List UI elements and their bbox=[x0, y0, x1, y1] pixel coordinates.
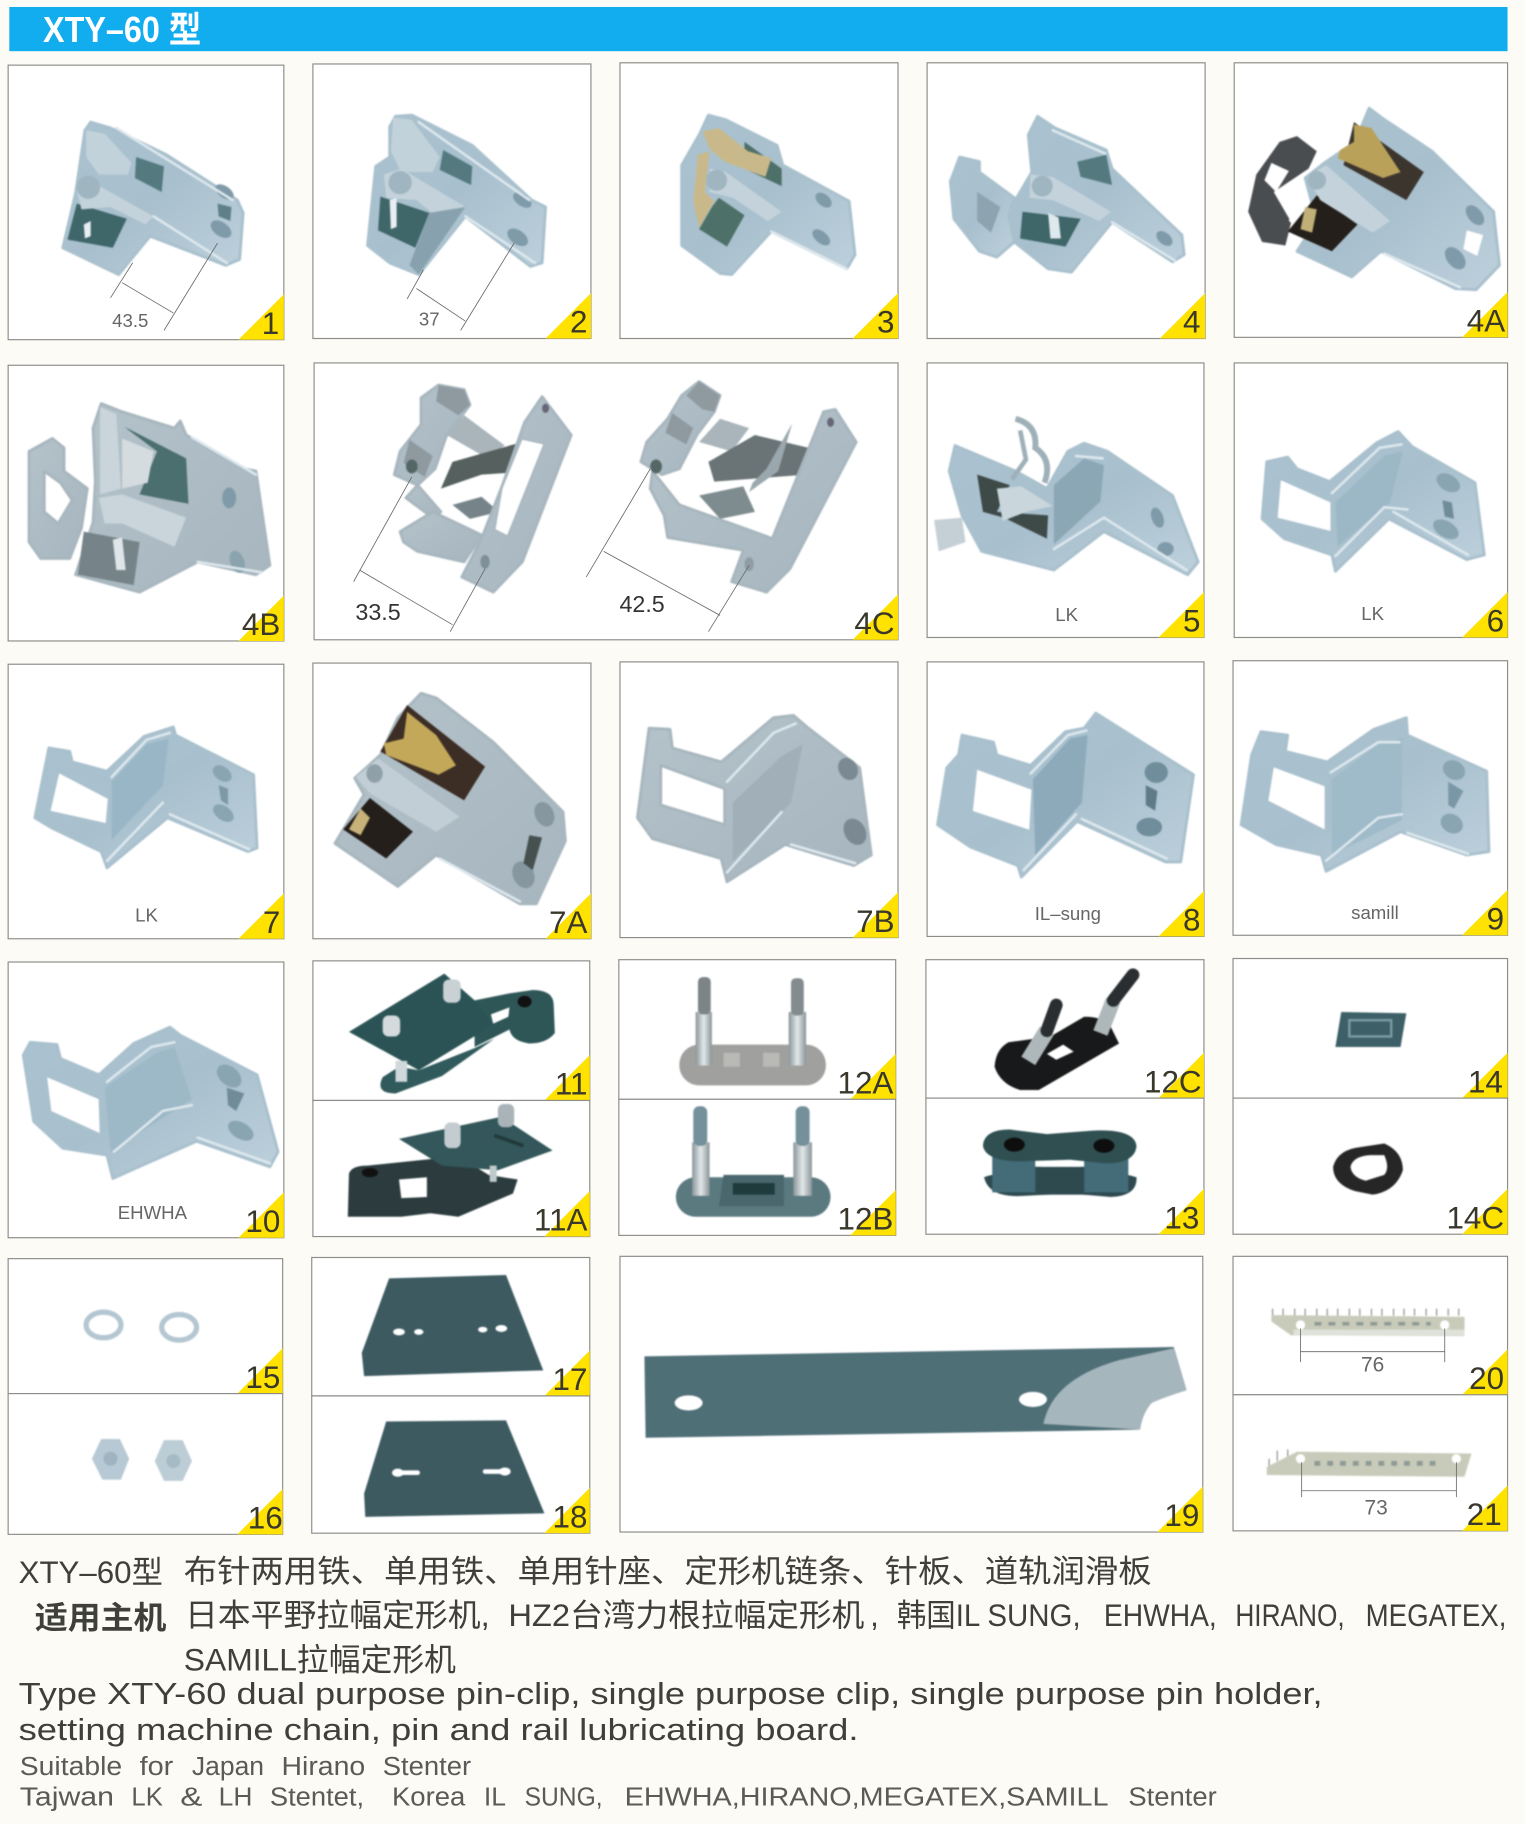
part: black pin holder 12C bbox=[995, 975, 1133, 1090]
text: applicable machines in Chinese: 日本平野拉幅定形机, bbox=[185, 1598, 490, 1633]
number tag 21: 21 bbox=[1467, 1497, 1502, 1532]
dimensions 33.5 and 42.5: 42.5 bbox=[619, 591, 665, 617]
number tag 15 bbox=[237, 1348, 283, 1395]
number tag 4: 4 bbox=[1183, 305, 1200, 340]
part: clip 4 bbox=[950, 116, 1184, 272]
panel: item 4A bbox=[1234, 63, 1508, 339]
part: clip 7A bbox=[335, 693, 565, 904]
number tag 5 bbox=[1159, 592, 1204, 639]
title banner bbox=[9, 7, 1508, 51]
number tag 7 bbox=[238, 893, 284, 940]
panel: item 8 bbox=[927, 662, 1204, 938]
number tag 9 bbox=[1462, 890, 1508, 936]
text: English suitable machines: Hirano bbox=[282, 1753, 365, 1781]
number tag 20 bbox=[1462, 1349, 1508, 1396]
number tag 19 bbox=[1157, 1487, 1203, 1533]
part: spring washers bbox=[86, 1312, 197, 1340]
part: left frame bbox=[394, 385, 571, 592]
number tag 8: 8 bbox=[1183, 903, 1200, 938]
dimension 73: 73 bbox=[1364, 1497, 1388, 1520]
panel: item 12B bbox=[619, 1099, 896, 1237]
panel: item 20 bbox=[1233, 1256, 1508, 1396]
brand label LK: LK bbox=[135, 904, 159, 925]
number tag 7: 7 bbox=[263, 905, 280, 940]
part: clip 9 bbox=[1241, 718, 1489, 871]
text: applicable machines in Chinese: HIRANO, bbox=[1235, 1598, 1345, 1633]
part: clip 10 bbox=[23, 1027, 278, 1178]
part: plate 17 bbox=[362, 1275, 543, 1376]
number tag 1: 1 bbox=[262, 306, 279, 341]
text: applicable machines in Chinese: HZ2台湾力根拉幅定形机 bbox=[508, 1598, 864, 1633]
panel: item 1 bbox=[8, 65, 284, 341]
dimension 76: 76 bbox=[1361, 1353, 1384, 1376]
panel: item 14C bbox=[1233, 1098, 1508, 1235]
text: English suitable machines: IL bbox=[484, 1783, 506, 1811]
part: pin plate 20 bbox=[1271, 1309, 1465, 1336]
number tag 4A: 4A bbox=[1467, 304, 1505, 339]
text: English suitable machines: Tajwan bbox=[20, 1783, 114, 1811]
brand label EHWHA: EHWHA bbox=[118, 1202, 188, 1223]
part: chain link with plate bbox=[349, 974, 555, 1093]
number tag 20: 20 bbox=[1469, 1361, 1504, 1396]
part: right frame bbox=[641, 382, 856, 592]
text: applicable machines in Chinese: EHWHA, bbox=[1104, 1598, 1217, 1633]
number tag 16: 16 bbox=[248, 1501, 283, 1536]
panel: item 7B bbox=[620, 662, 898, 939]
number tag 4C bbox=[853, 594, 898, 641]
number tag 3: 3 bbox=[877, 305, 895, 340]
panel: item 9 bbox=[1233, 661, 1508, 936]
number tag 13: 13 bbox=[1164, 1200, 1199, 1235]
number tag 6: 6 bbox=[1487, 604, 1504, 639]
number tag 12C: 12C bbox=[1144, 1064, 1202, 1099]
part: clip 2 bbox=[368, 115, 546, 275]
text: applicable machines in Chinese: , bbox=[870, 1598, 879, 1633]
part: chain link 13 bbox=[983, 1130, 1137, 1197]
text: applicable machines in Chinese: 适用主机 bbox=[35, 1601, 166, 1636]
number tag 1 bbox=[238, 294, 284, 341]
part: wave washer 14C bbox=[1333, 1143, 1403, 1195]
number tag 19: 19 bbox=[1164, 1498, 1199, 1533]
text: applicable machines in Chinese: SAMILL拉幅定形机 bbox=[184, 1642, 456, 1677]
title banner: XTY–60 型 bbox=[43, 9, 201, 50]
number tag 10: 10 bbox=[245, 1204, 280, 1239]
text: English suitable machines: for bbox=[140, 1753, 174, 1781]
number tag 14 bbox=[1462, 1053, 1508, 1099]
dimension 37 bbox=[407, 243, 514, 330]
panel: item 16 bbox=[8, 1394, 283, 1536]
part: small plate 14 bbox=[1335, 1012, 1406, 1047]
brand label samill: samill bbox=[1351, 902, 1399, 923]
text: English suitable machines: Suitable bbox=[20, 1753, 122, 1781]
number tag 3 bbox=[853, 293, 898, 340]
panel: item 11A bbox=[313, 1100, 590, 1238]
panel: item 13 bbox=[926, 1098, 1204, 1235]
panel: item 4 bbox=[927, 63, 1205, 340]
number tag 2: 2 bbox=[570, 305, 587, 340]
part: clip 1 bbox=[63, 122, 243, 275]
panel: item 12A bbox=[619, 960, 896, 1100]
number tag 7A bbox=[546, 893, 591, 940]
number tag 11: 11 bbox=[555, 1067, 587, 1102]
panel: item 7A bbox=[313, 663, 591, 940]
number tag 7B bbox=[853, 892, 898, 939]
text: English suitable machines bbox=[20, 1753, 1217, 1811]
number tag 17 bbox=[544, 1351, 590, 1397]
number tag 4C: 4C bbox=[854, 606, 895, 641]
dimensions 33.5 and 42.5 bbox=[354, 469, 749, 632]
part: clip 5 bbox=[934, 419, 1198, 575]
panel: item 17 bbox=[312, 1257, 590, 1397]
panel: item 18 bbox=[312, 1396, 590, 1534]
number tag 18: 18 bbox=[553, 1499, 587, 1534]
text: English suitable machines: LH bbox=[219, 1783, 252, 1811]
part: clip 4A bbox=[1248, 108, 1499, 290]
part: clip 6 bbox=[1262, 432, 1484, 571]
number tag 14: 14 bbox=[1468, 1064, 1503, 1099]
panel: item 7 bbox=[8, 664, 284, 940]
number tag 12B: 12B bbox=[838, 1202, 893, 1237]
part: hex nuts bbox=[92, 1439, 192, 1481]
panel: item 6 bbox=[1234, 363, 1508, 639]
number tag 2 bbox=[546, 293, 591, 340]
dimensions 33.5 and 42.5: 33.5 bbox=[355, 599, 401, 625]
number tag 16 bbox=[237, 1489, 283, 1536]
number tag 11A: 11A bbox=[534, 1203, 587, 1238]
part: clip 3 bbox=[682, 115, 855, 275]
number tag 5: 5 bbox=[1183, 604, 1200, 639]
text: English suitable machines: Stenter bbox=[1128, 1783, 1217, 1811]
part: pin plate 21 bbox=[1267, 1449, 1471, 1477]
part: lubricating bar 19 bbox=[644, 1347, 1186, 1438]
panel: item 5 bbox=[927, 363, 1204, 639]
text: English suitable machines: Japan bbox=[192, 1753, 264, 1781]
number tag 7B: 7B bbox=[856, 904, 895, 939]
panel: item 2 bbox=[313, 64, 591, 340]
dimension 43.5: 43.5 bbox=[112, 310, 148, 331]
number tag 8 bbox=[1159, 891, 1204, 938]
part: pin holder 12A bbox=[679, 977, 826, 1085]
number tag 10 bbox=[238, 1192, 284, 1239]
text: applicable machines in Chinese: 韩国IL SUNG, bbox=[897, 1598, 1081, 1633]
text: applicable machines in Chinese: MEGATEX, bbox=[1366, 1598, 1506, 1633]
dimension 73 bbox=[1302, 1462, 1456, 1520]
panel: item 21 bbox=[1233, 1395, 1508, 1532]
text: English suitable machines: LK bbox=[131, 1783, 163, 1811]
number tag 12A: 12A bbox=[838, 1065, 893, 1100]
text: product description in Chinese: 布针两用铁、单用铁、单用针座、定形机链条、针板、道轨润滑板 bbox=[184, 1554, 1152, 1589]
part: plate 18 bbox=[364, 1420, 544, 1517]
part: pin holder 12B bbox=[676, 1106, 831, 1217]
text: English product description: Type XTY-60 dual purpose pin-clip, single purpose clip, single purpose pin holder, bbox=[19, 1678, 1323, 1711]
brand label IL-sung: IL–sung bbox=[1035, 903, 1101, 924]
dimension 43.5 bbox=[111, 243, 218, 331]
text: English product description bbox=[19, 1678, 1323, 1747]
panel: item 3 bbox=[620, 63, 898, 340]
panel: item 15 bbox=[8, 1259, 283, 1395]
text: applicable machines in Chinese bbox=[35, 1598, 1506, 1677]
panel: item 14 bbox=[1233, 959, 1508, 1099]
text: English suitable machines: & bbox=[180, 1783, 202, 1811]
part: clip 7B bbox=[637, 715, 871, 882]
dimension 37: 37 bbox=[419, 309, 440, 330]
text: English suitable machines: Stentet, bbox=[270, 1783, 364, 1811]
part: clip 7 bbox=[35, 727, 257, 868]
panel: item 4B bbox=[8, 365, 284, 642]
number tag 6 bbox=[1462, 592, 1508, 639]
text: English product description: setting machine chain, pin and rail lubricating board. bbox=[19, 1714, 858, 1747]
panel: item 4C bbox=[314, 363, 898, 641]
number tag 14C: 14C bbox=[1446, 1200, 1504, 1235]
number tag 7A: 7A bbox=[549, 905, 587, 940]
text: English suitable machines: Korea bbox=[392, 1783, 466, 1811]
text: English suitable machines: SUNG, bbox=[525, 1783, 603, 1811]
number tag 21 bbox=[1462, 1485, 1508, 1532]
number tag 17: 17 bbox=[553, 1362, 587, 1397]
brand label LK: LK bbox=[1361, 603, 1385, 624]
panel: item 11 bbox=[313, 961, 590, 1102]
panel: item 12C bbox=[926, 960, 1204, 1099]
text: English suitable machines: EHWHA,HIRANO,MEGATEX,SAMILL bbox=[625, 1783, 1109, 1811]
text: English suitable machines: Stenter bbox=[383, 1753, 472, 1781]
number tag 15: 15 bbox=[245, 1360, 280, 1395]
number tag 18 bbox=[544, 1488, 590, 1534]
number tag 9: 9 bbox=[1487, 901, 1504, 936]
brand label LK: LK bbox=[1055, 604, 1079, 625]
number tag 11 bbox=[544, 1055, 590, 1102]
number tag 4 bbox=[1160, 293, 1205, 340]
panel: item 19 bbox=[620, 1256, 1203, 1533]
part: clip 8 bbox=[938, 713, 1193, 877]
number tag 4B bbox=[238, 596, 284, 642]
number tag 4B: 4B bbox=[242, 607, 280, 642]
number tag 4A bbox=[1462, 292, 1508, 339]
part: clip 4B bbox=[29, 404, 270, 592]
number tag 13 bbox=[1159, 1189, 1204, 1235]
text: product description in Chinese: XTY–60型 bbox=[19, 1555, 163, 1590]
part: chain link with raised plate bbox=[348, 1104, 553, 1217]
panel: item 10 bbox=[8, 962, 284, 1239]
dimension 76 bbox=[1300, 1328, 1445, 1376]
